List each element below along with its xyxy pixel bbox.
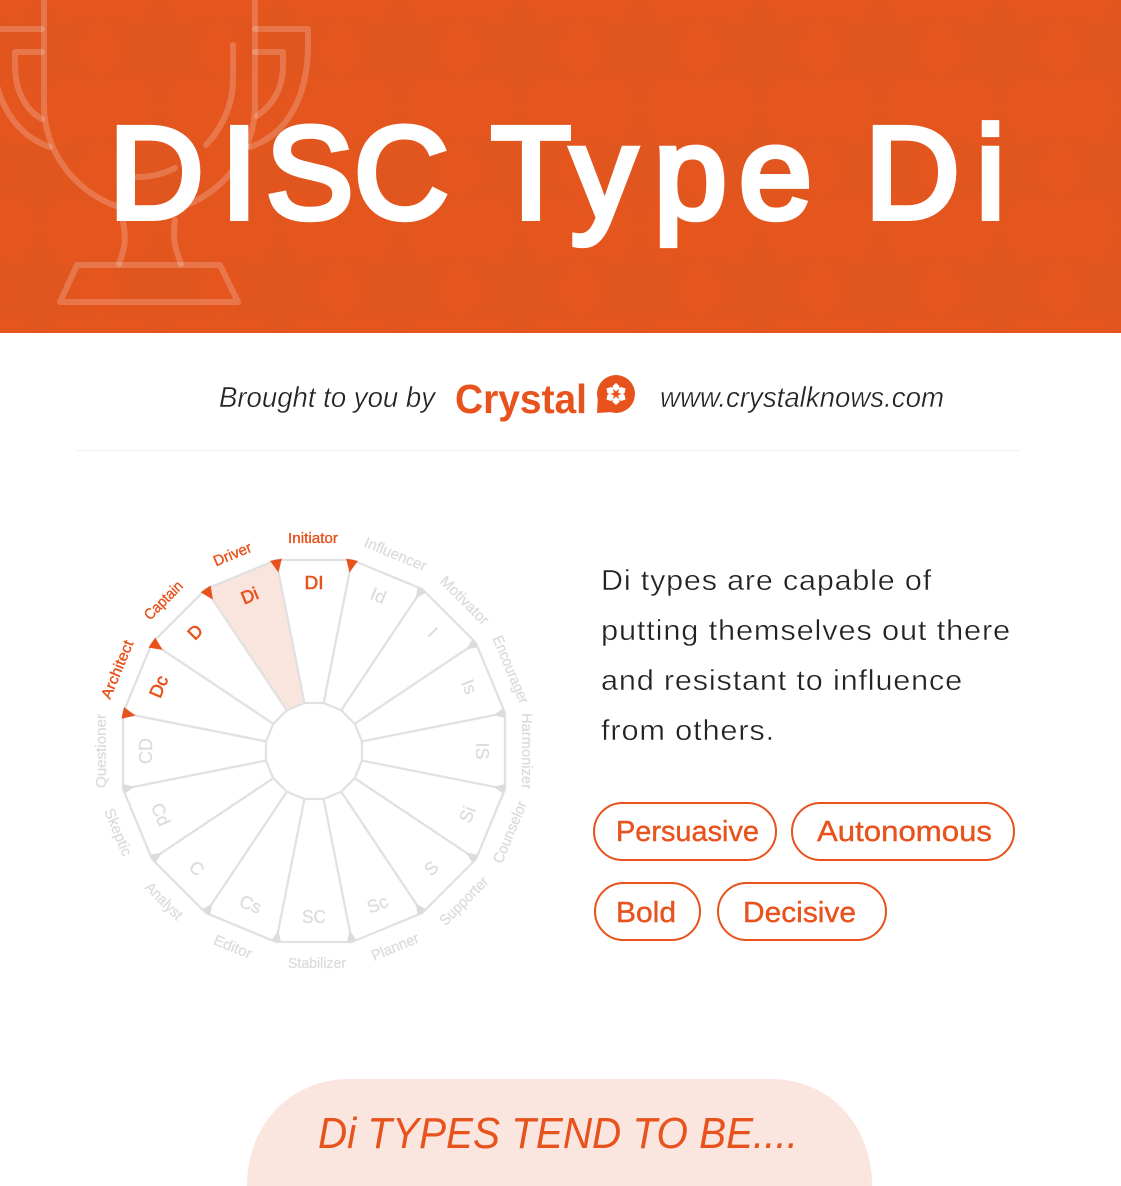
text block: description: putting themselves out there bbox=[601, 615, 1011, 647]
segment codes: Di bbox=[238, 583, 261, 608]
type names around the wheel: Driver bbox=[211, 539, 254, 570]
text block: description: Di types are capable of bbox=[601, 565, 932, 597]
tag: Decisive bbox=[718, 883, 886, 940]
tag: Autonomous: Autonomous bbox=[817, 816, 992, 848]
segment codes: CD bbox=[136, 738, 156, 764]
segment codes: SC bbox=[302, 907, 326, 927]
panel: attribution row bbox=[219, 375, 944, 422]
text: brought to you by: Brought to you by bbox=[219, 382, 436, 414]
segment codes: Cd bbox=[147, 800, 174, 829]
icon: trophy outline bbox=[0, 0, 308, 302]
type names around the wheel: Stabilizer bbox=[288, 955, 346, 972]
text block: description bbox=[601, 565, 1011, 747]
wheel outline and spokes bbox=[123, 560, 505, 942]
type names around the wheel: Planner bbox=[369, 930, 422, 965]
type names around the wheel: Skeptic bbox=[100, 806, 135, 859]
tag: Persuasive: Persuasive bbox=[616, 816, 759, 848]
section heading tab bbox=[247, 1079, 872, 1186]
text block: description: and resistant to influence bbox=[601, 665, 963, 697]
highlighted segment: Di bbox=[206, 560, 304, 710]
type names around the wheel: Motivator bbox=[436, 573, 492, 629]
title: DISC Type Di bbox=[109, 99, 1005, 246]
type names around the wheel: Analyst bbox=[141, 879, 187, 924]
segment codes: DI bbox=[304, 573, 324, 593]
markers: orange vertices bbox=[122, 559, 358, 721]
type names around the wheel: Influencer bbox=[362, 534, 429, 575]
tag: Autonomous bbox=[792, 803, 1014, 860]
segment codes: Sc bbox=[364, 891, 391, 918]
type names around the wheel: Architect bbox=[98, 637, 138, 702]
segment codes: Si bbox=[455, 803, 480, 826]
segment codes: Cs bbox=[236, 891, 264, 918]
type names around the wheel bbox=[93, 530, 535, 972]
type names around the wheel: Harmonizer bbox=[518, 713, 535, 789]
segment codes: IS bbox=[472, 742, 492, 760]
segment codes: Is bbox=[457, 676, 481, 697]
panel: header banner bbox=[0, 0, 1121, 333]
type names around the wheel: Initiator bbox=[288, 530, 338, 547]
type names around the wheel: Supporter bbox=[436, 873, 492, 929]
text block: description: from others. bbox=[601, 715, 775, 747]
heading: Di types tend to be: Di TYPES TEND TO BE.... bbox=[318, 1109, 798, 1158]
segment codes: Dc bbox=[145, 673, 172, 701]
logo: Crystal wordmark: Crystal bbox=[455, 376, 587, 422]
segment codes bbox=[136, 573, 492, 927]
segment codes: D bbox=[184, 621, 207, 644]
segment codes: C bbox=[185, 857, 208, 880]
type names around the wheel: Encourager bbox=[489, 633, 532, 706]
segment codes: I bbox=[424, 623, 442, 641]
text: website url: www.crystalknows.com bbox=[660, 382, 944, 414]
tag: Decisive: Decisive bbox=[743, 897, 856, 929]
segment codes: S bbox=[420, 857, 443, 880]
chart: DISC wheel bbox=[93, 530, 535, 972]
tag: Bold: Bold bbox=[616, 897, 676, 929]
icon: Crystal speech bubble flower bbox=[597, 375, 635, 413]
tag: Persuasive bbox=[594, 803, 776, 860]
type names around the wheel: Captain bbox=[141, 578, 187, 624]
segment codes: Id bbox=[368, 584, 389, 608]
markers: grey vertices bbox=[123, 587, 505, 942]
type names around the wheel: Editor bbox=[211, 932, 254, 963]
type names around the wheel: Counselor bbox=[490, 799, 531, 866]
type names around the wheel: Questioner bbox=[93, 714, 110, 788]
tag: Bold bbox=[595, 883, 700, 940]
